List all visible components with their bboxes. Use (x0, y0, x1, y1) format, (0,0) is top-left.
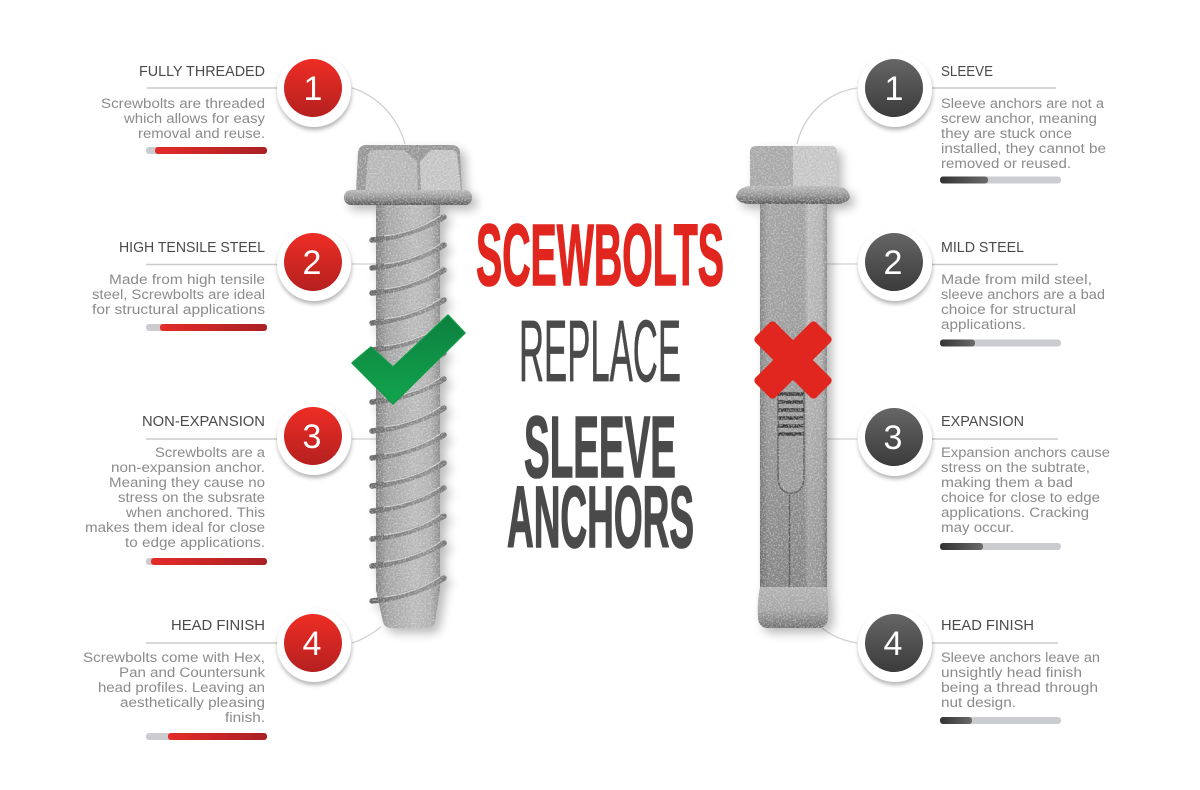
text: ANCHORS (507, 469, 694, 566)
number badge 3 (858, 402, 932, 476)
body text: choice for close to edge (941, 490, 1100, 505)
body text: they are stuck once (941, 126, 1072, 141)
heading: EXPANSION (941, 413, 1024, 430)
panel: high tensile steel (92, 227, 351, 331)
body text (101, 96, 265, 141)
body text: Made from high tensile (109, 272, 265, 287)
rating bar (940, 717, 1061, 724)
body text: unsightly head finish (941, 665, 1082, 680)
panel: head finish screwbolt (83, 608, 351, 740)
body text: applications. Cracking (941, 505, 1089, 520)
body text: stress on the subsrate (118, 490, 265, 505)
rating bar (146, 733, 267, 740)
body text: being a thread through (941, 680, 1098, 695)
body text: Expansion anchors cause (941, 445, 1110, 460)
sleeve flange (736, 186, 850, 204)
title (476, 207, 724, 566)
body text (85, 445, 266, 550)
screwbolt illustration (344, 145, 472, 628)
sleeve shading (760, 202, 827, 588)
body text: Screwbolts are threaded (101, 96, 265, 111)
body text: to edge applications. (125, 535, 265, 550)
title: REPLACE (519, 303, 681, 400)
number badge 4 (277, 608, 351, 682)
heading: MILD STEEL (941, 239, 1024, 256)
number badge 3: 3 (884, 419, 902, 457)
body text (941, 96, 1106, 171)
body text: when anchored. This (125, 505, 265, 520)
panel: non-expansion (85, 401, 351, 565)
body text: making them a bad (941, 475, 1073, 490)
screwbolt threads (372, 216, 444, 601)
body text: steel, Screwbolts are ideal (92, 287, 265, 302)
body text (941, 650, 1100, 710)
rating bar (940, 543, 1061, 550)
number badge 2: 2 (884, 244, 902, 282)
number badge 2: 2 (303, 244, 321, 282)
body text (92, 272, 265, 317)
number badge 3 (277, 401, 351, 475)
body text (941, 445, 1110, 535)
body text: Meaning they cause no (109, 475, 265, 490)
body text: may occur. (941, 520, 1014, 535)
heading: HEAD FINISH (941, 617, 1034, 634)
rating bar (940, 340, 1061, 346)
body text: stress on the subtrate, (941, 460, 1090, 475)
number badge 1: 1 (304, 70, 322, 108)
body text: which allows for easy (123, 111, 265, 126)
title: SLEEVE (524, 399, 676, 496)
panel: fully threaded (101, 53, 351, 154)
number badge 2 (858, 227, 932, 301)
screwbolt shaft (376, 205, 440, 628)
body text: finish. (225, 710, 265, 725)
rating bar (146, 558, 267, 565)
rating bar (940, 176, 1061, 184)
body text: Made from mild steel, (941, 272, 1092, 287)
body text: installed, they cannot be (941, 141, 1106, 156)
screwbolt flange (344, 190, 472, 205)
screwbolt hex head (356, 145, 462, 192)
panel: head finish sleeve anchor (858, 608, 1100, 724)
number badge 4: 4 (884, 625, 902, 663)
body text: nut design. (941, 695, 1016, 710)
body text: screw anchor, meaning (941, 111, 1097, 126)
body text: head profiles. Leaving an (98, 680, 265, 695)
body text: Screwbolts are a (155, 445, 266, 460)
number badge 3: 3 (303, 418, 321, 456)
sleeve hex head (750, 146, 837, 190)
body text: removed or reused. (941, 156, 1071, 171)
heading: HEAD FINISH (171, 617, 265, 634)
heading: HIGH TENSILE STEEL (119, 239, 265, 256)
panel: mild steel (858, 227, 1105, 346)
sleeve anchor illustration (736, 146, 850, 628)
sleeve end collar (758, 587, 828, 628)
icon: red cross (753, 320, 833, 400)
body text: aesthetically pleasing (120, 695, 265, 710)
number badge 1: 1 (885, 70, 903, 108)
body text (83, 650, 265, 725)
body text: applications. (941, 317, 1026, 332)
body text: non-expansion anchor. (111, 460, 265, 475)
body text: for structural applications (92, 302, 265, 317)
heading: SLEEVE (941, 63, 993, 80)
number badge 4: 4 (303, 625, 321, 663)
panel: sleeve (858, 53, 1106, 184)
rating bar (146, 147, 267, 154)
body text: sleeve anchors are a bad (941, 287, 1105, 302)
connector lines (352, 88, 857, 643)
heading: NON-EXPANSION (142, 413, 265, 430)
number badge 2 (277, 227, 351, 301)
text: SCEWBOLTS (476, 207, 724, 304)
body text: Sleeve anchors leave an (941, 650, 1100, 665)
body text: makes them ideal for close (85, 520, 265, 535)
body text: Screwbolts come with Hex, (83, 650, 265, 665)
icon: green check mark (352, 315, 465, 404)
number badge 4 (858, 608, 932, 682)
body text: Sleeve anchors are not a (941, 96, 1105, 111)
number badge 1 (277, 53, 351, 127)
body text: removal and reuse. (138, 126, 265, 141)
sleeve body (760, 202, 827, 588)
panel: expansion (858, 402, 1110, 550)
body text (941, 272, 1105, 332)
expansion slot (778, 380, 804, 587)
heading: FULLY THREADED (139, 63, 265, 80)
rating bar (146, 324, 267, 331)
body text: Pan and Countersunk (119, 665, 265, 680)
body text: choice for structural (941, 302, 1076, 317)
number badge 1 (858, 53, 932, 127)
